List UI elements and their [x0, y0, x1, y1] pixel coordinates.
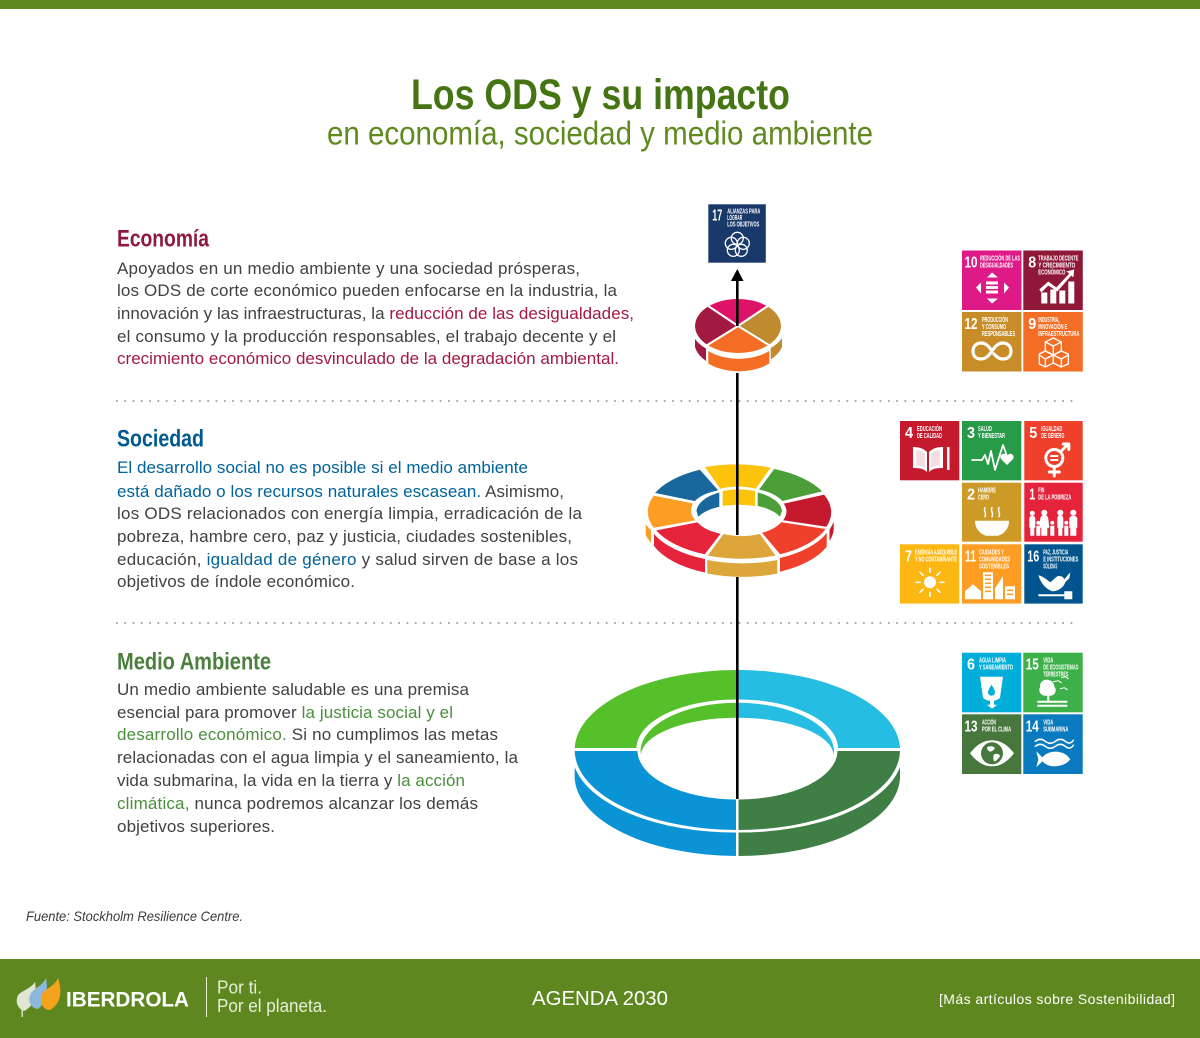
- tile: SDG 9: INFRAESTRUCTURA: [1038, 331, 1079, 338]
- tile: SDG 4: 4: [905, 425, 913, 442]
- footer title: AGENDA 2030: [532, 988, 668, 1010]
- tile: SDG 7: Y NO CONTAMINANTE: [915, 556, 957, 563]
- text block: Sociedad: educación, igualdad de género y salud sirven de base a los: [117, 550, 578, 569]
- text block: Medio Ambiente: Un medio ambiente saludable es una premisa: [117, 680, 470, 699]
- tile: SDG 10: REDUCCIÓN DE LAS: [980, 254, 1020, 262]
- tile: SDG 12: [962, 312, 1022, 372]
- tile: SDG 10: 10: [964, 254, 978, 272]
- top bar: [0, 0, 1200, 9]
- tile: SDG 11: 11: [965, 548, 976, 565]
- tile: SDG 17: LOGRAR: [727, 215, 742, 222]
- icon: equality arrows: [976, 272, 1009, 304]
- text block: Medio Ambiente: vida submarina, la vida en la tierra y la acción: [117, 771, 465, 790]
- title: Los ODS y su impacto: [411, 72, 790, 119]
- tile: SDG 15: 15: [1026, 657, 1039, 674]
- tile: SDG 9: INDUSTRIA,: [1038, 317, 1059, 324]
- chart: economy pie: [694, 298, 782, 371]
- tile: SDG 11: SOSTENIBLES: [979, 563, 1009, 570]
- tile: SDG 12: PRODUCCIÓN: [982, 315, 1008, 324]
- tile: SDG 2: [962, 483, 1021, 542]
- tile: SDG 6: AGUA LIMPIA: [979, 658, 1006, 665]
- arrow: [731, 269, 744, 799]
- tile: SDG 14: SUBMARINA: [1043, 726, 1068, 733]
- tile: SDG 2: HAMBRE: [978, 488, 996, 495]
- text block: Sociedad: [117, 458, 583, 591]
- icon: water glass: [980, 677, 1003, 709]
- tile: SDG 8: Y CRECIMIENTO: [1038, 262, 1076, 270]
- tile: SDG 16: E INSTITUCIONES: [1043, 556, 1078, 563]
- text block: Economía: innovación y las infraestructuras, la reducción de las desigualdades,: [117, 304, 634, 323]
- icon: city: [965, 572, 1015, 599]
- footer link: [Más artículos sobre Sostenibilidad]: [939, 991, 1175, 1007]
- tile: SDG 14: VIDA: [1043, 719, 1053, 726]
- tile: SDG 10: [962, 250, 1022, 310]
- tile: SDG 16: SÓLIDAS: [1043, 561, 1057, 570]
- tile: SDG 17: ALIANZAS PARA: [727, 208, 760, 215]
- text block: Economía: crecimiento económico desvinculado de la degradación ambiental.: [117, 349, 619, 368]
- icon: infinity: [973, 343, 1011, 359]
- tile: SDG 3: Y BIENESTAR: [978, 433, 1005, 440]
- tile: SDG 1: 1: [1029, 487, 1036, 504]
- tile: SDG 16: [1024, 544, 1083, 604]
- tile: SDG 7: ENERGÍA ASEQUIBLE: [915, 547, 957, 556]
- tile: SDG 6: Y SANEAMIENTO: [979, 665, 1013, 672]
- title: en economía, sociedad y medio ambiente: [327, 114, 873, 152]
- heading: Medio Ambiente: Medio Ambiente: [117, 648, 271, 676]
- tile: SDG 3: 3: [967, 425, 975, 442]
- tile: SDG 2: CERO: [978, 495, 989, 502]
- text block: Medio Ambiente: desarrollo económico. Si no cumplimos las metas: [117, 725, 498, 744]
- text block: Economía: Apoyados en un medio ambiente y una sociedad prósperas,: [117, 259, 580, 278]
- tile: SDG 5: IGUALDAD: [1041, 426, 1062, 433]
- tile: SDG 10: DESIGUALDADES: [980, 262, 1013, 270]
- text block: Medio Ambiente: objetivos superiores.: [117, 817, 275, 836]
- tile: SDG 9: 9: [1028, 316, 1037, 333]
- tile: SDG 3: SALUD: [978, 426, 992, 433]
- tile: SDG 2: 2: [967, 487, 975, 504]
- tile: SDG 8: 8: [1028, 254, 1037, 272]
- tile: SDG 13: POR EL CLIMA: [982, 726, 1011, 733]
- chart: society ring: [646, 464, 834, 577]
- tile: SDG 1: [1024, 483, 1083, 542]
- text block: Sociedad: objetivos de índole económico.: [117, 572, 355, 591]
- tile: SDG 7: [900, 544, 959, 604]
- tile: SDG 13: ACCIÓN: [982, 717, 996, 726]
- tile: SDG 9: [1023, 312, 1083, 372]
- icon: eye: [970, 740, 1014, 766]
- icon: waves and fish: [1035, 739, 1073, 748]
- tile: SDG 8: TRABAJO DECENTE: [1038, 256, 1078, 262]
- tile: SDG 17: [708, 204, 766, 263]
- tile: SDG 17: LOS OBJETIVOS: [727, 221, 759, 228]
- tile: SDG 12: RESPONSABLES: [982, 331, 1015, 338]
- icon: flower: [725, 232, 749, 256]
- tile: SDG 1: DE LA POBREZA: [1038, 495, 1071, 502]
- tile: SDG 8: [1023, 250, 1083, 310]
- text block: Medio Ambiente: [117, 680, 519, 836]
- text block: Economía: el consumo y la producción responsables, el trabajo decente y el: [117, 327, 616, 346]
- tile: SDG 17: 17: [712, 207, 722, 224]
- tile: SDG 13: [962, 714, 1021, 774]
- text block: Medio Ambiente: climática, nunca podremos alcanzar los demás: [117, 794, 478, 813]
- tile: SDG 5: DE GÉNERO: [1041, 431, 1065, 440]
- tile: SDG 6: 6: [967, 657, 975, 674]
- icon: growth chart: [1039, 270, 1074, 304]
- icon: bowl: [975, 521, 1009, 536]
- tile: SDG 15: DE ECOSISTEMAS: [1043, 665, 1078, 672]
- tile: SDG 16: 16: [1027, 548, 1040, 565]
- tile: SDG 5: 5: [1029, 425, 1038, 442]
- tile: SDG 3: [962, 421, 1021, 480]
- text block: Sociedad: está dañado o los recursos naturales escasean. Asimismo,: [117, 482, 564, 501]
- text block: Sociedad: pobreza, hambre cero, paz y justicia, ciudades sostenibles,: [117, 527, 572, 546]
- tile: SDG 14: 14: [1026, 718, 1039, 735]
- tile: SDG 7: 7: [905, 548, 912, 565]
- text block: Sociedad: El desarrollo social no es posible si el medio ambiente: [117, 458, 528, 477]
- icon: heartbeat: [972, 445, 1007, 470]
- icon: people: [1029, 515, 1077, 536]
- slogan: Por ti.: [217, 978, 262, 998]
- tile: SDG 11: [962, 544, 1021, 604]
- tile: SDG 16: PAZ, JUSTICIA: [1043, 549, 1068, 556]
- text block: Medio Ambiente: relacionadas con el agua limpia y el saneamiento, la: [117, 748, 519, 767]
- tile: SDG 5: [1024, 421, 1083, 480]
- logo: Iberdrola wordmark: IBERDROLA: [66, 988, 189, 1012]
- icon: tree: [1037, 680, 1067, 707]
- tile: SDG 8: ECONÓMICO: [1038, 268, 1066, 276]
- heading: Economía: Economía: [117, 226, 210, 252]
- title: [327, 72, 873, 152]
- tile: SDG 6: [962, 653, 1021, 712]
- tile: SDG 12: 12: [964, 316, 978, 333]
- tile: SDG 15: TERRESTRES: [1043, 672, 1068, 679]
- tile: SDG 14: [1023, 714, 1083, 774]
- tile: SDG 15: [1023, 653, 1083, 712]
- icon: dove and gavel: [1038, 572, 1072, 599]
- heading: Sociedad: Sociedad: [117, 426, 204, 452]
- tile: SDG 1: FIN: [1038, 488, 1044, 495]
- icon: sun: [924, 576, 936, 588]
- tile: SDG 4: EDUCACIÓN: [917, 424, 942, 433]
- slogan: Por el planeta.: [217, 996, 327, 1016]
- tile: SDG 4: DE CALIDAD: [917, 433, 942, 440]
- footer: [0, 959, 1200, 1038]
- chart: environment ring: [575, 670, 900, 856]
- icon: cubes: [1039, 338, 1068, 367]
- tile: SDG 12: Y CONSUMO: [982, 324, 1006, 331]
- logo: Iberdrola leaves: [17, 978, 60, 1017]
- tile: SDG 13: 13: [964, 718, 978, 735]
- tile: SDG 9: INNOVACIÓN E: [1038, 322, 1067, 331]
- slogan: [217, 978, 327, 1016]
- tile: SDG 11: CIUDADES Y: [979, 549, 1004, 556]
- tile: SDG 11: COMUNIDADES: [979, 556, 1010, 563]
- tile: SDG 4: [900, 421, 959, 480]
- text block: Sociedad: los ODS relacionados con energía limpia, erradicación de la: [117, 504, 583, 523]
- icon: book: [913, 447, 950, 472]
- text block: Economía: [117, 259, 634, 368]
- text block: Medio Ambiente: esencial para promover la justicia social y el: [117, 703, 453, 722]
- source note: Fuente: Stockholm Resilience Centre.: [26, 908, 243, 924]
- tile: SDG 15: VIDA: [1043, 658, 1053, 665]
- icon: gender symbol: [1046, 444, 1069, 476]
- text block: Economía: los ODS de corte económico pueden enfocarse en la industria, la: [117, 281, 618, 300]
